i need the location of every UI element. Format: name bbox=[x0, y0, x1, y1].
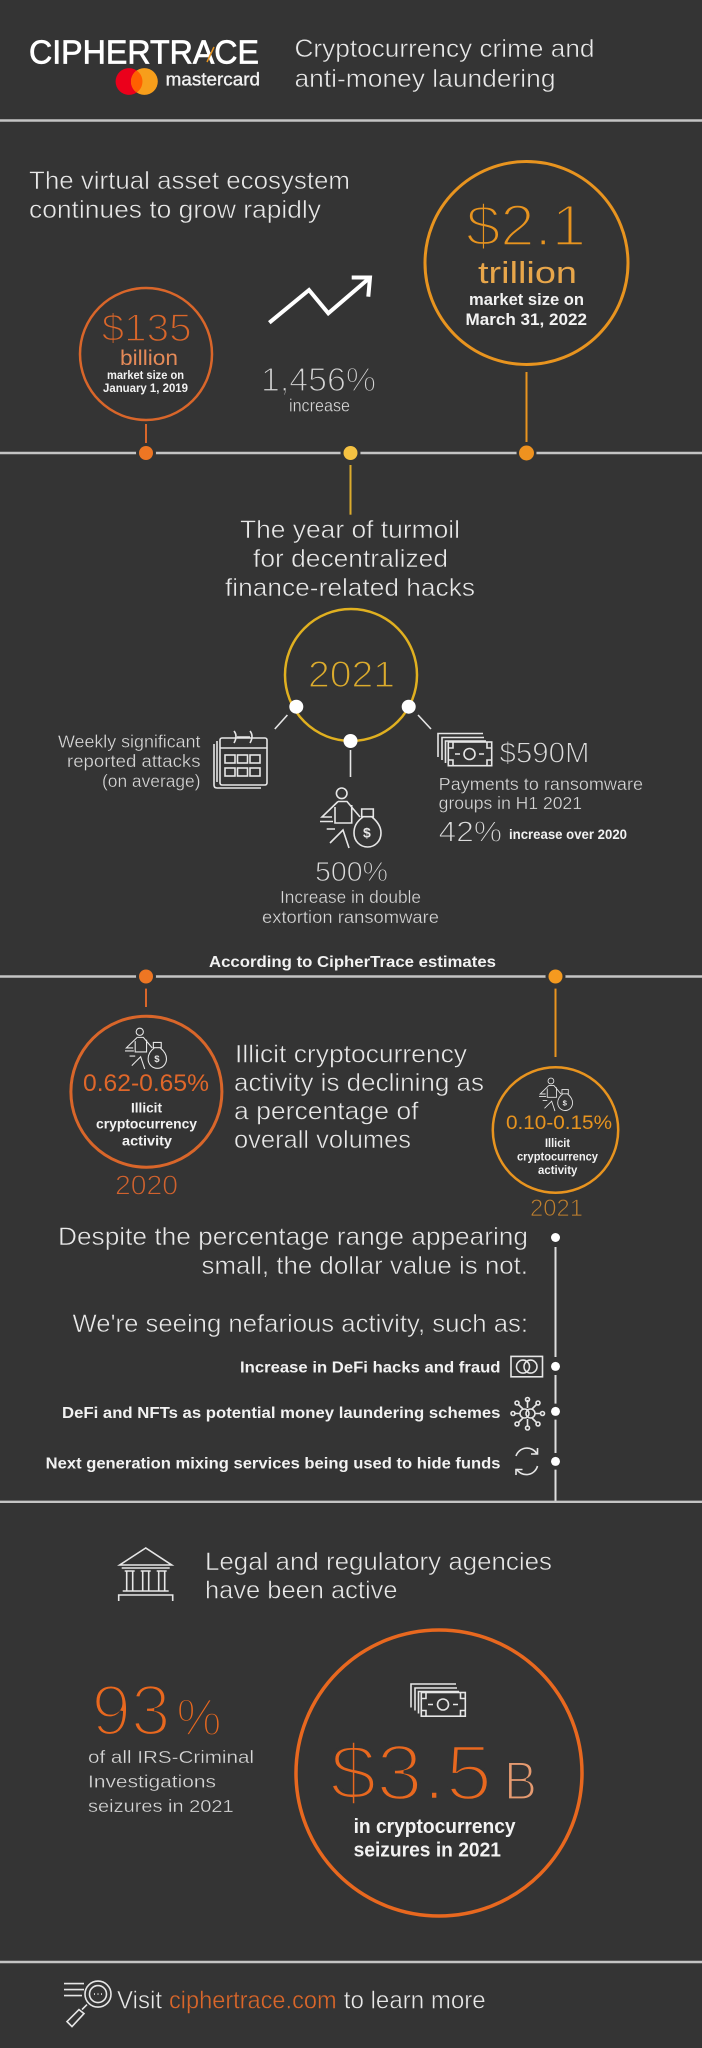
circle: $3.5B seizures: $3.5 bbox=[330, 1728, 492, 1816]
panel: CipherTrace estimates bbox=[0, 954, 702, 1222]
text: dollar value: Despite the percentage range appearing bbox=[58, 1223, 528, 1251]
circle: $135 billion bbox=[80, 288, 212, 420]
icon: magnifier bbox=[64, 1981, 111, 2027]
item: DeFi and NFTs: DeFi and NFTs as potential money laundering schemes bbox=[62, 1405, 501, 1422]
circle: 2020 illicit activity: cryptocurrency bbox=[96, 1116, 197, 1132]
circle: $135 billion: billion bbox=[120, 347, 178, 370]
title: anti-money laundering bbox=[294, 65, 556, 93]
call to action bbox=[117, 1986, 486, 2014]
text: weekly attacks: (on average) bbox=[102, 771, 200, 791]
heading: year of turmoil: The year of turmoil bbox=[240, 516, 460, 544]
stat: 500% extortion: extortion ransomware bbox=[262, 907, 439, 927]
timeline: estimates bbox=[0, 966, 702, 1057]
icon: runner 2020 bbox=[125, 1028, 166, 1069]
circle: 2021 hub bbox=[275, 609, 431, 777]
icon: runner with money bag bbox=[320, 788, 381, 848]
text: nefarious activity intro: We're seeing nefarious activity, such as: bbox=[72, 1310, 528, 1338]
icon: runner with money bag: $ bbox=[363, 824, 371, 840]
icon: runner 2020: $ bbox=[154, 1054, 160, 1065]
stat: 500% extortion: Increase in double bbox=[280, 887, 421, 907]
circle: $2.1 trillion: $2.1 bbox=[466, 194, 586, 259]
item: mixing services: Next generation mixing services being used to hide funds bbox=[46, 1456, 501, 1473]
heading: year of turmoil: for decentralized bbox=[253, 545, 448, 573]
stat: 93%: % bbox=[176, 1689, 222, 1747]
heading: legal agencies: Legal and regulatory agencies bbox=[205, 1548, 552, 1576]
call to action: ciphertrace.com bbox=[169, 1986, 337, 2014]
circle: $135 billion: market size on bbox=[107, 370, 184, 382]
circle: $3.5B seizures: seizures in 2021 bbox=[354, 1840, 501, 1862]
text: weekly attacks bbox=[58, 732, 201, 791]
title: Cryptocurrency crime and bbox=[294, 35, 594, 63]
text: illicit activity declining: Illicit cryptocurrency bbox=[235, 1040, 468, 1068]
circle: $2.1 trillion bbox=[425, 162, 628, 364]
icon: banknotes large bbox=[411, 1684, 465, 1716]
stat: $590M payments bbox=[439, 738, 643, 849]
text: dollar value: small, the dollar value is not. bbox=[202, 1252, 528, 1280]
text: illicit activity declining: activity is declining as bbox=[234, 1069, 484, 1097]
item: mixing services bbox=[46, 1448, 537, 1475]
logo: CipherTrace Mastercard: CIPHERTRACE bbox=[29, 34, 259, 70]
circle: 2021 illicit activity: Illicit bbox=[545, 1138, 570, 1150]
stat: 93%: 93 bbox=[92, 1672, 170, 1751]
circle: 2021 illicit activity: cryptocurrency bbox=[517, 1152, 599, 1164]
heading: legal agencies bbox=[205, 1548, 552, 1605]
icon: card bbox=[511, 1356, 542, 1377]
stat: 93%: Investigations bbox=[88, 1772, 216, 1792]
footer bbox=[64, 1981, 486, 2027]
stat: 93% bbox=[88, 1672, 254, 1816]
stat: $590M payments: groups in H1 2021 bbox=[439, 793, 582, 813]
logo: CipherTrace Mastercard bbox=[29, 34, 260, 95]
text: illicit activity declining: a percentage of bbox=[234, 1098, 419, 1126]
icon: courthouse bbox=[119, 1548, 173, 1601]
circle: $3.5B seizures: in cryptocurrency bbox=[354, 1816, 516, 1838]
circle: 2020 illicit activity bbox=[71, 1016, 222, 1167]
heading: year of turmoil: finance-related hacks bbox=[225, 574, 475, 602]
timeline: vertical list bbox=[551, 1233, 560, 1501]
label: 2021: 2021 bbox=[530, 1195, 583, 1222]
circle: $135 billion: January 1, 2019 bbox=[103, 383, 188, 395]
text: illicit activity declining: overall volumes bbox=[234, 1126, 411, 1154]
icon: network bbox=[511, 1398, 544, 1430]
heading: virtual asset ecosystem bbox=[29, 167, 350, 224]
circle: 2020 illicit activity: activity bbox=[122, 1133, 172, 1149]
stat: 500% extortion: 500% bbox=[315, 856, 388, 887]
stat: 1,456% increase bbox=[261, 361, 376, 416]
title bbox=[294, 35, 594, 93]
panel: legal and regulatory bbox=[88, 1548, 582, 1916]
circle: $3.5B seizures bbox=[296, 1630, 582, 1916]
circle: 2021 illicit activity bbox=[493, 1067, 618, 1193]
text: illicit activity declining bbox=[234, 1040, 484, 1154]
circle: $3.5B seizures: B bbox=[504, 1750, 537, 1812]
text: dollar value bbox=[58, 1223, 528, 1280]
circle: 2020 illicit activity: Illicit bbox=[131, 1100, 162, 1116]
item: DeFi hacks bbox=[240, 1356, 542, 1377]
text: weekly attacks: Weekly significant bbox=[58, 732, 201, 752]
text: weekly attacks: reported attacks bbox=[67, 751, 201, 771]
label: 2020: 2020 bbox=[115, 1170, 178, 1201]
item: DeFi hacks: Increase in DeFi hacks and fraud bbox=[240, 1360, 500, 1376]
panel: market growth bbox=[29, 162, 628, 420]
circle: 2021 illicit activity: activity bbox=[538, 1165, 578, 1177]
header bbox=[29, 34, 594, 95]
heading: year of turmoil bbox=[225, 516, 475, 602]
panel: year of turmoil bbox=[58, 516, 643, 927]
icon: calendar bbox=[214, 731, 267, 788]
heading: legal agencies: have been active bbox=[205, 1577, 398, 1605]
circle: $2.1 trillion: market size on bbox=[469, 291, 584, 309]
stat: $590M payments: Payments to ransomware bbox=[439, 774, 643, 794]
logo: CipherTrace Mastercard: mastercard bbox=[166, 69, 260, 90]
panel: nefarious activity bbox=[46, 1223, 560, 1501]
stat: $590M payments: 42% bbox=[439, 817, 502, 849]
circle: $2.1 trillion: March 31, 2022 bbox=[466, 311, 587, 329]
item: DeFi and NFTs bbox=[62, 1398, 544, 1430]
icon: refresh bbox=[516, 1448, 538, 1475]
stat: 1,456% increase: increase bbox=[289, 396, 350, 416]
icon: rising arrow bbox=[269, 278, 370, 323]
call to action: to learn more bbox=[344, 1986, 486, 2014]
circle: 2021 illicit activity: 0.10-0.15% bbox=[506, 1113, 612, 1134]
stat: 500% extortion bbox=[262, 856, 439, 927]
heading: virtual asset ecosystem: continues to grow rapidly bbox=[29, 196, 322, 224]
circle: $2.1 trillion: trillion bbox=[478, 255, 577, 290]
icon: runner 2021: $ bbox=[563, 1098, 568, 1107]
stat: 93%: of all IRS-Criminal bbox=[88, 1747, 254, 1767]
icon: banknotes bbox=[438, 734, 492, 766]
stat: 1,456% increase: 1,456% bbox=[261, 361, 376, 398]
stat: $590M payments: increase over 2020 bbox=[509, 827, 627, 842]
stat: 93%: seizures in 2021 bbox=[88, 1796, 234, 1816]
heading: according to CipherTrace: According to CipherTrace estimates bbox=[209, 954, 496, 971]
circle: $135 billion: $135 bbox=[102, 307, 192, 350]
stat: $590M payments: $590M bbox=[500, 738, 590, 770]
circle: 2021 hub: 2021 bbox=[308, 654, 395, 695]
timeline: market growth bbox=[0, 372, 702, 515]
circle: 2020 illicit activity: 0.62-0.65% bbox=[83, 1070, 209, 1097]
call to action: Visit bbox=[117, 1986, 162, 2014]
heading: virtual asset ecosystem: The virtual asset ecosystem bbox=[29, 167, 350, 195]
